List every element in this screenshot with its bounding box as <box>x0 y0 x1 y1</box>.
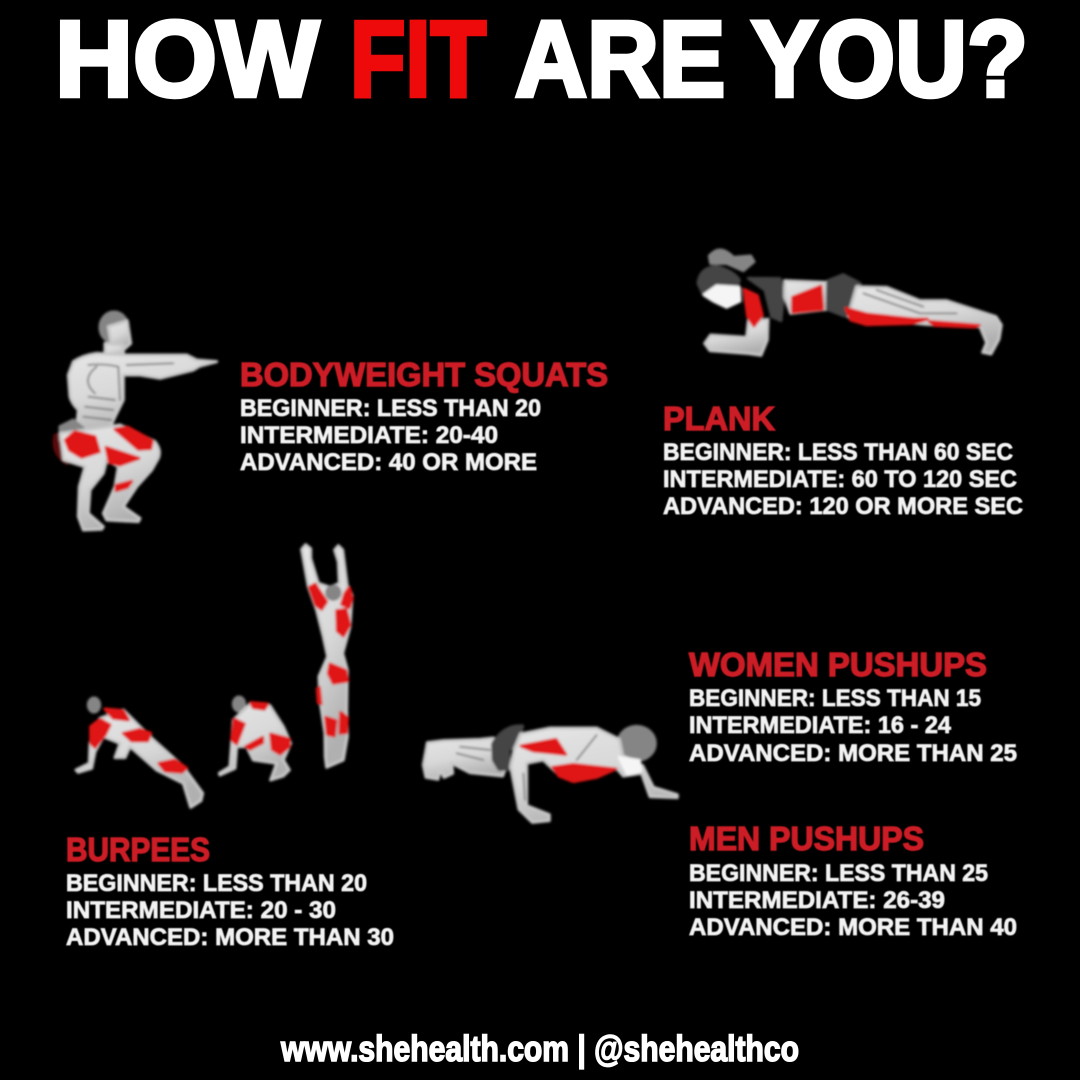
icon: pushup figure <box>423 726 677 822</box>
men pushups levels <box>689 860 1017 941</box>
burpees levels: INTERMEDIATE: 20 - 30 <box>66 897 336 924</box>
panel: plank <box>663 400 1023 520</box>
burpees levels <box>66 870 394 951</box>
heading: bodyweight squats: BODYWEIGHT SQUATS <box>240 356 608 393</box>
panel: women pushups <box>689 646 1017 767</box>
title: ARE YOU? <box>515 0 1028 119</box>
women pushups levels: ADVANCED: MORE THAN 25 <box>689 740 1017 767</box>
title <box>55 0 1028 119</box>
icon: squat figure <box>54 312 217 530</box>
burpees levels: ADVANCED: MORE THAN 30 <box>66 924 394 951</box>
panel: men pushups <box>689 820 1017 941</box>
heading: women pushups: WOMEN PUSHUPS <box>689 646 987 683</box>
men pushups levels: ADVANCED: MORE THAN 40 <box>689 914 1017 941</box>
heading: men pushups: MEN PUSHUPS <box>689 820 924 857</box>
squats levels: INTERMEDIATE: 20-40 <box>240 422 498 449</box>
footer: website and handle: www.shehealth.com | @shehealthco <box>280 1028 799 1070</box>
icon: burpee figures <box>76 545 352 807</box>
burpees levels: BEGINNER: LESS THAN 20 <box>66 870 367 897</box>
squats levels: ADVANCED: 40 OR MORE <box>240 449 537 476</box>
women pushups levels: INTERMEDIATE: 16 - 24 <box>689 712 951 739</box>
title: FIT <box>350 0 486 119</box>
men pushups levels: INTERMEDIATE: 26-39 <box>689 887 945 914</box>
panel: bodyweight squats <box>240 356 608 476</box>
figure: jump stage <box>302 545 352 767</box>
plank levels: BEGINNER: LESS THAN 60 SEC <box>663 439 1013 466</box>
icon: plank figure <box>698 250 1001 355</box>
women pushups levels <box>689 685 1017 767</box>
squats levels: BEGINNER: LESS THAN 20 <box>240 395 541 422</box>
heading: burpees: BURPEES <box>66 831 210 868</box>
panel: burpees <box>66 831 394 951</box>
title: HOW <box>55 0 319 119</box>
figure: plank stage <box>76 698 203 807</box>
heading: plank: PLANK <box>663 400 775 437</box>
men pushups levels: BEGINNER: LESS THAN 25 <box>689 860 988 887</box>
women pushups levels: BEGINNER: LESS THAN 15 <box>689 685 981 712</box>
plank levels <box>663 439 1023 520</box>
plank levels: INTERMEDIATE: 60 TO 120 SEC <box>663 466 1017 493</box>
squats levels <box>240 395 541 476</box>
plank levels: ADVANCED: 120 OR MORE SEC <box>663 493 1023 520</box>
figure: crouch stage <box>219 697 291 780</box>
